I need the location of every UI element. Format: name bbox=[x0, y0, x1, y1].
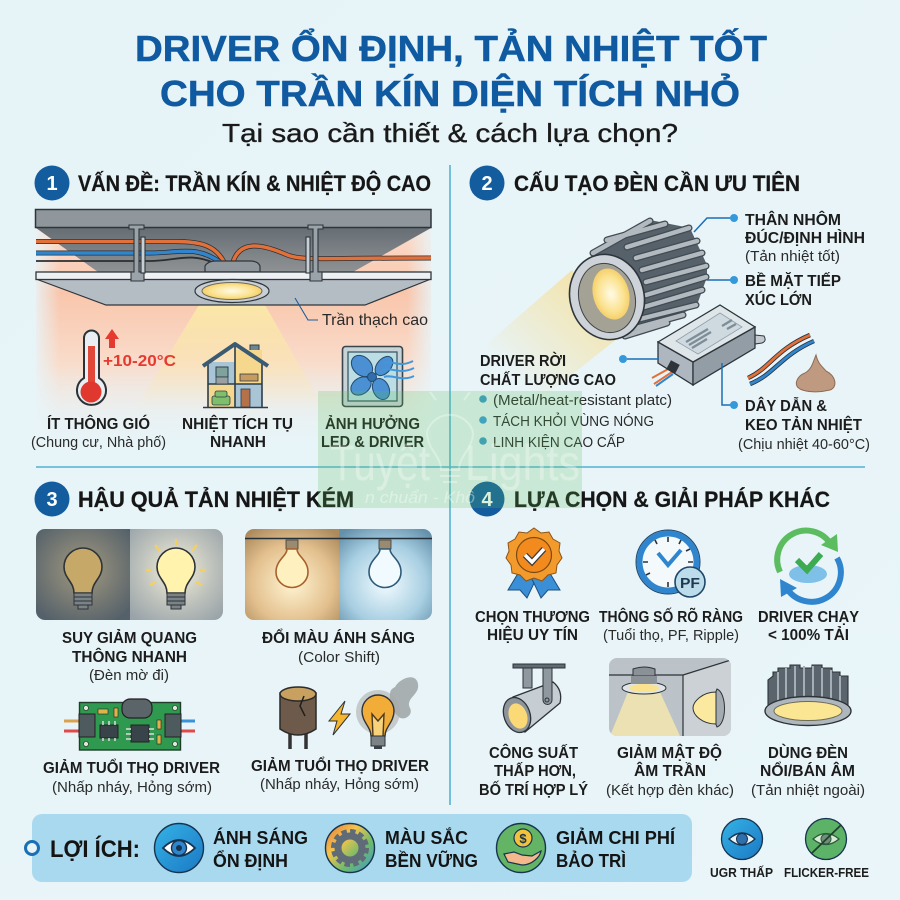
callout: driver rời: LINH KIỆN CAO CẤP bbox=[493, 434, 625, 451]
callout: thân nhôm bbox=[694, 210, 865, 265]
badge: UGR thấp bbox=[710, 818, 773, 880]
icon: quality badge bbox=[506, 528, 562, 598]
callout: dây dẫn và keo bbox=[722, 363, 870, 453]
label: ảnh hưởng: LED & DRIVER bbox=[321, 434, 424, 451]
label: suy giảm quang thông bbox=[62, 628, 197, 684]
text: giảm chi phí: GIẢM CHI PHÍ bbox=[556, 827, 676, 848]
label: suy giảm quang thông: THÔNG NHANH bbox=[72, 647, 187, 666]
label: thương hiệu: HIỆU UY TÍN bbox=[487, 625, 578, 644]
label: dùng đèn nổi: (Tản nhiệt ngoài) bbox=[751, 782, 865, 799]
icon: clock with PF: PF bbox=[680, 575, 700, 592]
label: giảm tuổi thọ driver 2: GIẢM TUỔI THỌ DRIVER bbox=[251, 756, 429, 775]
text: giảm chi phí: BẢO TRÌ bbox=[556, 850, 626, 871]
callout: bề mặt tiếp xúc: XÚC LỚN bbox=[745, 290, 812, 309]
callout: bề mặt tiếp xúc bbox=[707, 271, 841, 309]
icon: colour gear bbox=[326, 824, 374, 872]
icon: clock with PF bbox=[636, 530, 705, 597]
text: màu sắc bền vững: MÀU SẮC bbox=[385, 827, 468, 848]
subtitle: Tại sao cần thiết & cách lựa chọn? bbox=[222, 118, 678, 148]
icon: circuit board bbox=[64, 699, 195, 750]
heading: section 2 bbox=[470, 166, 800, 200]
label: suy giảm quang thông: SUY GIẢM QUANG bbox=[62, 628, 197, 647]
image: dim and bright bulbs bbox=[36, 529, 223, 620]
label: công suất: THẤP HƠN, bbox=[494, 761, 576, 780]
label: giảm tuổi thọ driver 2 bbox=[251, 756, 429, 793]
heading: section 4: 4 bbox=[481, 489, 493, 511]
callout: bề mặt tiếp xúc: BỀ MẶT TIẾP bbox=[745, 271, 841, 290]
label: giảm mật độ bbox=[606, 743, 734, 799]
icon: driver box bbox=[652, 305, 765, 386]
label: giảm mật độ: ÂM TRẦN bbox=[634, 761, 706, 780]
text: màu sắc bền vững bbox=[385, 827, 478, 871]
heading: section 2: CẤU TẠO ĐÈN CẦN ƯU TIÊN bbox=[514, 171, 800, 196]
heading: section 3 bbox=[34, 482, 354, 516]
watermark: Tuyệt Lights: Tuyệt bbox=[330, 435, 430, 491]
text: ánh sáng ổn định: ỔN ĐỊNH bbox=[213, 850, 288, 871]
icon: spotlight bbox=[499, 664, 565, 736]
image: ceiling and wall lights bbox=[609, 658, 731, 736]
heading: section 3: HẬU QUẢ TẢN NHIỆT KÉM bbox=[78, 487, 354, 512]
label: công suất: CÔNG SUẤT bbox=[489, 743, 578, 762]
badge: flicker-free bbox=[784, 818, 869, 880]
label: giảm mật độ: (Kết hợp đèn khác) bbox=[606, 782, 734, 799]
label: suy giảm quang thông: (Đèn mờ đi) bbox=[89, 667, 169, 684]
callout: driver rời bbox=[479, 351, 672, 451]
label: thương hiệu bbox=[475, 609, 590, 644]
label: nhiệt tích tụ bbox=[182, 414, 293, 451]
text: giảm chi phí bbox=[556, 827, 676, 871]
callout: driver rời: DRIVER RỜI bbox=[480, 351, 566, 370]
heading: section 1: VẤN ĐỀ: TRẦN KÍN & NHIỆT ĐỘ CAO bbox=[78, 171, 431, 196]
label: thông số: THÔNG SỐ RÕ RÀNG bbox=[599, 606, 743, 626]
label: giảm tuổi thọ driver 1: GIẢM TUỔI THỌ DRIVER bbox=[43, 758, 220, 777]
label: công suất: BỐ TRÍ HỢP LÝ bbox=[479, 779, 588, 799]
callout: driver rời: CHẤT LƯỢNG CAO bbox=[480, 370, 616, 389]
callout: thân nhôm: ĐÚC/ĐỊNH HÌNH bbox=[745, 228, 865, 247]
label: driver chạy: DRIVER CHẠY bbox=[758, 609, 859, 626]
label: ảnh hưởng bbox=[321, 414, 424, 451]
label: thông số bbox=[599, 606, 743, 644]
icon: LED downlight bbox=[480, 220, 707, 400]
icon: surface mounted light bbox=[765, 665, 851, 726]
heading: section 4 bbox=[470, 482, 830, 516]
label: dùng đèn nổi: NỔI/BÁN ÂM bbox=[760, 761, 855, 780]
image: colour shift bulbs bbox=[245, 529, 432, 620]
label: nhiệt tích tụ: NHIỆT TÍCH TỤ bbox=[182, 414, 293, 433]
heading: section 4: LỰA CHỌN & GIẢI PHÁP KHÁC bbox=[514, 487, 830, 512]
text: ánh sáng ổn định bbox=[213, 827, 308, 871]
label: ảnh hưởng: ẢNH HƯỞNG bbox=[325, 414, 420, 433]
ceiling illustration bbox=[36, 210, 431, 447]
icon: thermometer bbox=[77, 329, 176, 405]
callout: thân nhôm: (Tản nhiệt tốt) bbox=[745, 248, 840, 265]
title: CHO TRẦN KÍN DIỆN TÍCH NHỎ bbox=[160, 72, 740, 114]
label: thông số: (Tuổi thọ, PF, Ripple) bbox=[603, 627, 739, 644]
text: ánh sáng ổn định: ÁNH SÁNG bbox=[213, 827, 308, 848]
badge: flicker-free: FLICKER-FREE bbox=[784, 865, 869, 880]
callout: thân nhôm: THÂN NHÔM bbox=[745, 210, 841, 229]
ceiling illustration: Trần thạch cao bbox=[322, 312, 428, 329]
label: dùng đèn nổi bbox=[751, 743, 865, 799]
heading: lợi ích: LỢI ÍCH: bbox=[50, 835, 140, 863]
text: màu sắc bền vững: BỀN VỮNG bbox=[385, 850, 478, 871]
label: đổi màu ánh sáng: (Color Shift) bbox=[298, 649, 380, 666]
heading: section 1: 1 bbox=[46, 173, 58, 195]
icon: thermometer: +10-20°C bbox=[103, 353, 176, 370]
label: giảm mật độ: GIẢM MẬT ĐỘ bbox=[617, 743, 722, 762]
icon: burnt capacitor, bolt and bulb bbox=[280, 677, 418, 749]
label: ít thông gió: ÍT THÔNG GIÓ bbox=[47, 414, 150, 433]
label: thương hiệu: CHỌN THƯƠNG bbox=[475, 609, 590, 626]
panel: section 3 consequences bbox=[34, 482, 432, 796]
label: driver chạy bbox=[758, 609, 859, 644]
label: đổi màu ánh sáng: ĐỔI MÀU ÁNH SÁNG bbox=[262, 628, 415, 647]
callout: driver rời: (Metal/heat-resistant platc) bbox=[493, 392, 672, 409]
panel: section 2 structure bbox=[470, 166, 870, 453]
label: công suất bbox=[479, 743, 588, 799]
callout: dây dẫn và keo: DÂY DẪN & bbox=[745, 396, 827, 415]
label: đổi màu ánh sáng bbox=[262, 628, 415, 666]
panel: section 4 solutions bbox=[470, 482, 865, 799]
label: dùng đèn nổi: DÙNG ĐÈN bbox=[768, 743, 848, 762]
watermark: Tuyệt Lights: n chuẩn - Khô bbox=[365, 488, 475, 507]
icon: money hand: $ bbox=[519, 831, 527, 846]
icon: house bbox=[203, 344, 268, 408]
title bbox=[135, 26, 767, 114]
watermark: Tuyệt Lights bbox=[318, 391, 582, 508]
icon: fan bbox=[342, 346, 414, 406]
icon: eye bbox=[154, 824, 204, 872]
watermark: Tuyệt Lights: Lights bbox=[465, 435, 580, 491]
callout: dây dẫn và keo: KEO TẢN NHIỆT bbox=[745, 415, 862, 434]
callout: dây dẫn và keo: (Chịu nhiệt 40-60°C) bbox=[738, 436, 870, 453]
icon: driver load cycle bbox=[777, 531, 841, 602]
label: nhiệt tích tụ: NHANH bbox=[210, 434, 266, 451]
panel: section 1 problem bbox=[31, 166, 431, 451]
badge: UGR thấp: UGR THẤP bbox=[710, 865, 773, 880]
heading: section 1 bbox=[34, 166, 431, 200]
icon: wires and thermal paste bbox=[748, 335, 835, 392]
label: ít thông gió: (Chung cư, Nhà phố) bbox=[31, 434, 166, 451]
callout: driver rời: TÁCH KHỎI VÙNG NÓNG bbox=[493, 412, 654, 430]
label: giảm tuổi thọ driver 2: (Nhấp nháy, Hỏng sớm) bbox=[260, 776, 419, 793]
heading: section 3: 3 bbox=[46, 489, 58, 511]
heading: section 2: 2 bbox=[481, 173, 493, 195]
label: ít thông gió bbox=[31, 414, 166, 451]
icon: money hand bbox=[496, 824, 546, 872]
label: giảm tuổi thọ driver 1 bbox=[43, 758, 220, 796]
label: giảm tuổi thọ driver 1: (Nhấp nháy, Hỏng sớm) bbox=[52, 779, 212, 796]
panel: benefits bar bbox=[26, 814, 692, 882]
label: driver chạy: < 100% TẢI bbox=[768, 625, 849, 644]
title: DRIVER ỔN ĐỊNH, TẢN NHIỆT TỐT bbox=[135, 26, 767, 69]
